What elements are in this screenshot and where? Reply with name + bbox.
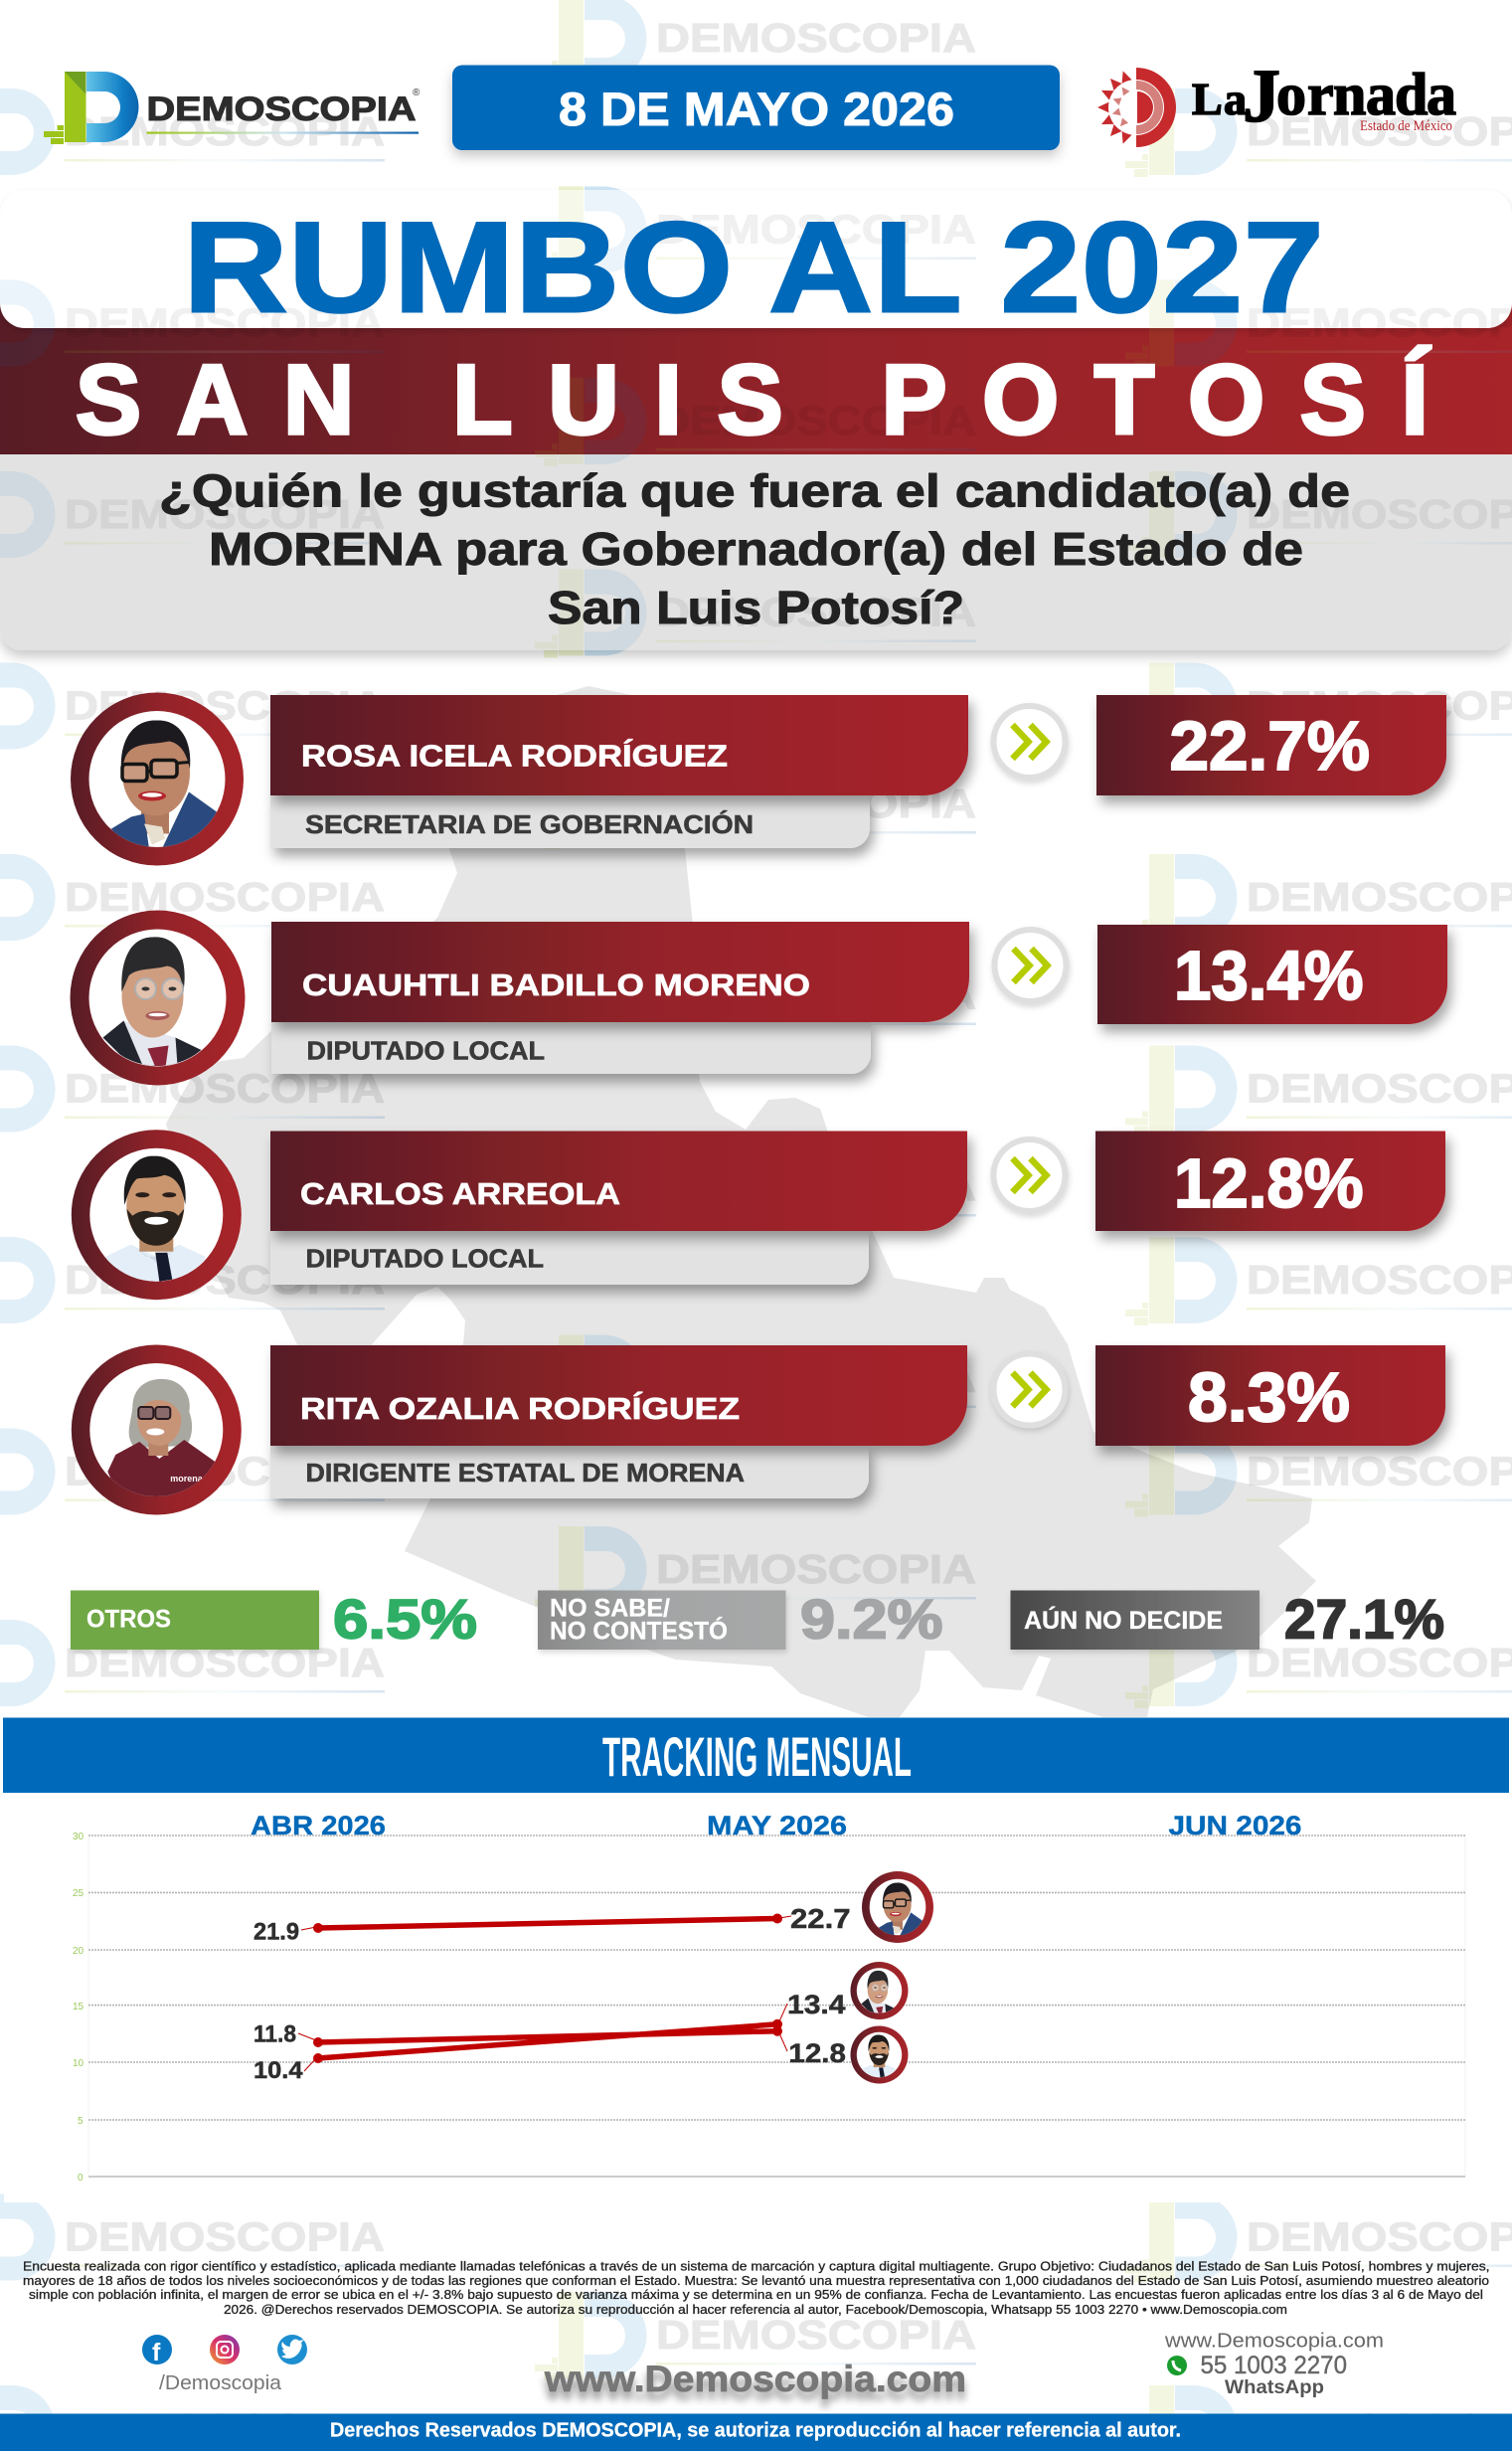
name bar: CUAUHTLI BADILLO MORENO xyxy=(302,967,810,1002)
month labels xyxy=(251,1811,1302,1840)
portrait: Rita Ozalia Rodríguez: morena xyxy=(170,1474,204,1484)
series lines xyxy=(298,1916,791,2071)
month labels: ABR 2026 xyxy=(251,1811,386,1840)
y axis labels: 30 xyxy=(73,1832,84,1842)
watermark pattern: DEMOSCOPIA xyxy=(65,1640,385,1685)
name bar xyxy=(271,922,969,1022)
role bar: DIPUTADO LOCAL xyxy=(306,1243,544,1273)
watermark pattern: DEMOSCOPIA xyxy=(65,1448,385,1493)
map silhouette of San Luis Potosí xyxy=(166,686,1316,1717)
name bar: CARLOS ARREOLA xyxy=(300,1176,620,1211)
panel: title card (white) xyxy=(0,190,1512,328)
contact block: www.Demoscopia.com xyxy=(1164,2331,1384,2353)
name bar xyxy=(270,695,968,795)
watermark over title panels: DEMOSCOPIA xyxy=(65,300,385,346)
icon: chevrons xyxy=(994,930,1066,1001)
stat: aún no decide xyxy=(1010,1587,1444,1651)
panel: state band (red) xyxy=(0,254,1512,454)
watermark over title panels: DEMOSCOPIA xyxy=(65,491,385,537)
value box xyxy=(1095,1345,1445,1446)
question text xyxy=(159,465,1350,633)
name bar xyxy=(270,1132,967,1231)
watermark pattern: DEMOSCOPIA xyxy=(65,491,385,537)
role bar xyxy=(270,1446,869,1498)
watermark over title panels: DEMOSCOPIA xyxy=(656,207,976,253)
candidate row: Rosa Icela Rodríguez xyxy=(71,692,1446,865)
logo: Demoscopia xyxy=(44,72,420,144)
social handle: /Demoscopia xyxy=(159,2372,282,2394)
data labels: 21.9 xyxy=(253,1919,299,1945)
line chart: tracking xyxy=(73,1811,1465,2184)
logo: La Jornada: ornada xyxy=(1276,62,1456,127)
stat: otros xyxy=(71,1587,477,1651)
name bar: RITA OZALIA RODRÍGUEZ xyxy=(300,1391,740,1426)
logo: La Jornada xyxy=(1097,55,1456,147)
watermark pattern: DEMOSCOPIA xyxy=(656,1163,976,1209)
title: RUMBO AL 2027 xyxy=(183,195,1324,340)
logo: Demoscopia: ® xyxy=(413,88,420,98)
role bar: DIPUTADO LOCAL xyxy=(306,1036,545,1066)
month labels: JUN 2026 xyxy=(1169,1811,1302,1840)
name bar: ROSA ICELA RODRÍGUEZ xyxy=(301,738,728,774)
value box: 13.4% xyxy=(1174,937,1364,1014)
watermark over title panels xyxy=(0,187,1512,658)
panel: question (grey) xyxy=(0,438,1512,650)
candidate row: Carlos Arreola xyxy=(72,1130,1445,1300)
website center: www.Demoscopia.com xyxy=(544,2359,966,2399)
question text: MORENA para Gobernador(a) del Estado de xyxy=(209,523,1303,575)
watermark pattern: DEMOSCOPIA xyxy=(65,682,385,728)
watermark pattern: DEMOSCOPIA xyxy=(65,2405,385,2451)
tracking banner xyxy=(3,1718,1509,1793)
data labels xyxy=(253,1903,851,2084)
candidate row: Rita Ozalia Rodríguez xyxy=(72,1344,1445,1515)
icon: chevrons xyxy=(994,1354,1066,1426)
data labels: 10.4 xyxy=(253,2057,303,2084)
stat: no sabe / no contestó: NO SABE/ xyxy=(550,1595,670,1623)
question text: San Luis Potosí? xyxy=(548,582,964,633)
data labels: 11.8 xyxy=(253,2020,296,2048)
mini portrait: Rosa Icela xyxy=(862,1871,933,1943)
panel: chart background xyxy=(4,1793,1509,2202)
question text: ¿Quién le gustaría que fuera el candidato(a) de xyxy=(159,465,1350,517)
mini portrait: Carlos xyxy=(851,2026,909,2084)
icon: facebook: f xyxy=(152,2339,161,2366)
icon: twitter xyxy=(277,2335,307,2364)
y axis labels xyxy=(73,1832,84,2184)
value box xyxy=(1097,925,1447,1024)
contact block xyxy=(1164,2331,1384,2398)
watermark pattern: DEMOSCOPIA xyxy=(656,207,976,253)
value box xyxy=(1096,695,1446,795)
stat: aún no decide: 27.1% xyxy=(1284,1587,1444,1651)
date badge: 8 DE MAYO 2026 xyxy=(559,83,954,135)
watermark pattern: DEMOSCOPIA xyxy=(65,874,385,920)
portrait: Carlos Arreola xyxy=(72,1130,242,1300)
value box: 22.7% xyxy=(1169,707,1370,785)
y axis labels: 10 xyxy=(73,2058,84,2069)
methodology note: mayores de 18 años de todos los niveles socioeconómicos y de todas las regiones que conforman el Estado. Muestra: Se levantó una muestra representativa con 1,000 ciudadanos del Estado de San Luis Potosí, asumiendo muestreo aleatorio xyxy=(23,2273,1489,2288)
tracking banner: TRACKING MENSUAL xyxy=(602,1725,912,1788)
watermark pattern: DEMOSCOPIA xyxy=(65,1066,385,1112)
value box: 8.3% xyxy=(1188,1358,1350,1436)
watermark pattern: DEMOSCOPIA xyxy=(656,781,976,826)
watermark pattern: DEMOSCOPIA xyxy=(656,2312,976,2358)
watermark pattern: DEMOSCOPIA xyxy=(65,108,385,154)
watermark pattern: DEMOSCOPIA xyxy=(656,15,976,61)
mini portrait: Cuauhtli xyxy=(851,1962,909,2019)
watermark pattern: DEMOSCOPIA xyxy=(65,300,385,346)
role bar: SECRETARIA DE GOBERNACIÓN xyxy=(305,809,754,839)
methodology note: Encuesta realizada con rigor científico y estadístico, aplicada mediante llamadas telefónicas a través de un sistema de marcación y captura digital multiagente. Grupo Objetivo: Ciudadanos del Estado de San Luis Potosí, hombres y mujeres, xyxy=(23,2259,1490,2273)
watermark pattern: DEMOSCOPIA xyxy=(656,972,976,1018)
data labels: 12.8 xyxy=(788,2038,846,2068)
value box: 12.8% xyxy=(1174,1144,1364,1222)
y axis labels: 15 xyxy=(73,2002,84,2013)
role bar xyxy=(270,1231,869,1285)
icon: instagram xyxy=(210,2335,240,2364)
state heading: SAN LUIS POTOSÍ xyxy=(76,344,1430,454)
icon: chevrons xyxy=(994,706,1066,778)
methodology note: 2026. @Derechos reservados DEMOSCOPIA. Se autoriza su reproducción al hacer referencia al autor, Facebook/Demoscopia, Whatsapp 55 1003 2270 • www.Demoscopia.com xyxy=(224,2302,1287,2317)
y axis labels: 20 xyxy=(73,1946,84,1957)
stat: no sabe / no contestó xyxy=(538,1587,942,1651)
role bar xyxy=(271,1021,871,1074)
y axis labels: 0 xyxy=(78,2173,84,2184)
methodology note xyxy=(23,2259,1490,2317)
logo: La Jornada: La xyxy=(1192,74,1247,124)
stat: no sabe / no contestó: NO CONTESTÓ xyxy=(550,1615,728,1645)
contact block: WhatsApp xyxy=(1225,2377,1324,2398)
logo: Demoscopia: DEMOSCOPIA xyxy=(147,90,416,128)
logo: La Jornada: Estado de México xyxy=(1360,118,1452,134)
watermark pattern: DEMOSCOPIA xyxy=(656,1546,976,1592)
watermark over title panels: DEMOSCOPIA xyxy=(656,398,976,443)
icon: whatsapp xyxy=(1167,2356,1187,2375)
stat: aún no decide: AÚN NO DECIDE xyxy=(1024,1605,1223,1635)
portrait: Rosa Icela Rodríguez xyxy=(71,692,244,865)
portrait: Cuauhtli Badillo Moreno xyxy=(70,911,245,1086)
y axis labels: 25 xyxy=(73,1888,84,1899)
portrait: Rita Ozalia Rodríguez xyxy=(72,1344,242,1515)
methodology note: simple con población infinita, el margen de error se ubica en el +/- 3.8% bajo supuesto de varianza máxima y se determina en un 95% de confianza. Fecha de Levantamiento. Las encuestas fueron aplicadas entre los días 3 al 6 de Mayo del xyxy=(29,2287,1483,2302)
data labels: 13.4 xyxy=(787,1990,845,2019)
data labels: 22.7 xyxy=(790,1903,851,1934)
footer bar: Derechos Reservados DEMOSCOPIA, se autoriza reproducción al hacer referencia al autor. xyxy=(330,2420,1181,2442)
watermark over title panels: DEMOSCOPIA xyxy=(656,589,976,634)
watermark pattern: DEMOSCOPIA xyxy=(65,1257,385,1303)
value box xyxy=(1095,1132,1445,1231)
role bar: DIRIGENTE ESTATAL DE MORENA xyxy=(306,1458,745,1488)
watermark pattern: DEMOSCOPIA xyxy=(656,398,976,443)
logo: La Jornada: J xyxy=(1243,55,1280,138)
stat: otros: OTROS xyxy=(86,1605,171,1633)
watermark pattern: DEMOSCOPIA xyxy=(656,1354,976,1400)
contact block: 55 1003 2270 xyxy=(1201,2352,1347,2379)
footer bar xyxy=(0,2414,1512,2451)
watermark pattern: DEMOSCOPIA xyxy=(65,2213,385,2259)
stat: otros: 6.5% xyxy=(333,1587,477,1651)
role bar xyxy=(270,795,870,848)
candidate row: Cuauhtli Badillo Moreno xyxy=(70,911,1447,1086)
date badge xyxy=(452,66,1060,150)
month labels: MAY 2026 xyxy=(707,1811,847,1840)
name bar xyxy=(270,1345,967,1446)
icon: chevrons xyxy=(994,1139,1066,1211)
watermark pattern: DEMOSCOPIA xyxy=(656,589,976,634)
icon: facebook xyxy=(142,2335,172,2366)
stat: no sabe / no contestó: 9.2% xyxy=(800,1587,942,1651)
y axis labels: 5 xyxy=(78,2116,84,2127)
